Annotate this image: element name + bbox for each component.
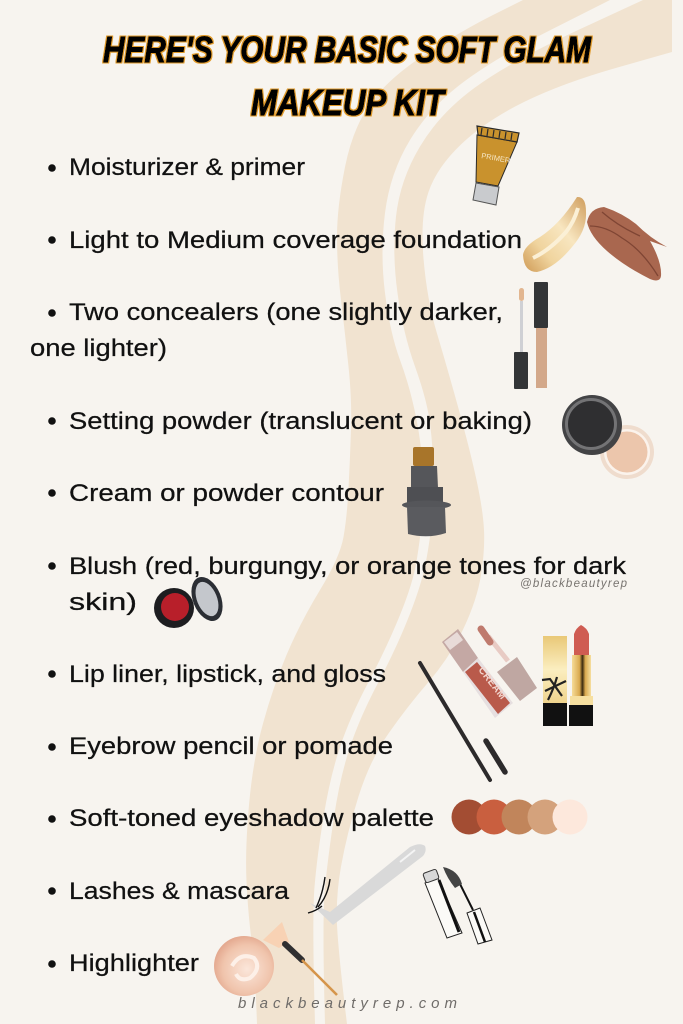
item: concealers: Two concealers (one slightly darker, — [69, 299, 503, 326]
item: setting powder: Setting powder (translucent or baking) — [69, 408, 532, 435]
icon: YSL lipstick — [542, 625, 593, 726]
item: contour: Cream or powder contour — [69, 480, 384, 507]
item: eyebrow: Eyebrow pencil or pomade — [69, 733, 393, 760]
watermark: @blackbeautyrep — [520, 578, 628, 590]
title: MAKEUP KIT — [251, 82, 447, 123]
icon: primer tube — [473, 126, 519, 205]
icon: lip liner pencil — [420, 663, 505, 780]
title — [103, 29, 592, 123]
item: lashes: Lashes & mascara — [69, 878, 290, 905]
background wave band — [246, 0, 672, 1024]
item: eyeshadow: Soft-toned eyeshadow palette — [69, 805, 434, 832]
checklist text — [30, 154, 627, 977]
icon: lash applicator — [308, 844, 426, 925]
icon: mascara — [423, 867, 492, 944]
item: blush: skin) — [69, 589, 137, 616]
item: blush — [48, 553, 627, 616]
item: concealers: one lighter) — [30, 335, 167, 362]
icon: eyeshadow palette — [452, 800, 588, 834]
icon: concealer wand and tube — [514, 282, 548, 389]
item: lips: Lip liner, lipstick, and gloss — [69, 661, 386, 688]
icon: highlighter swatch — [214, 936, 274, 996]
icon: primer tube: PRIMER — [481, 151, 512, 165]
icon: lip gloss — [442, 629, 537, 718]
icon: lip gloss: CREAM — [476, 665, 508, 702]
item: blush: Blush (red, burgungy, or orange tones for dark — [69, 553, 627, 580]
title: HERE'S YOUR BASIC SOFT GLAM — [103, 29, 592, 70]
icon: fan brush — [263, 922, 337, 995]
icon: contour stick — [402, 447, 451, 536]
icon: light foundation swatch — [523, 197, 586, 272]
item: concealers — [30, 299, 503, 362]
item: foundation: Light to Medium coverage foundation — [69, 227, 522, 254]
icon: dark foundation swatch — [587, 207, 667, 280]
footer website: blackbeautyrep.com — [238, 995, 457, 1012]
item: moisturizer: Moisturizer & primer — [69, 154, 305, 181]
icon: blush compact — [154, 572, 229, 628]
icon: setting powder jar — [562, 395, 654, 479]
item: highlighter: Highlighter — [69, 950, 199, 977]
